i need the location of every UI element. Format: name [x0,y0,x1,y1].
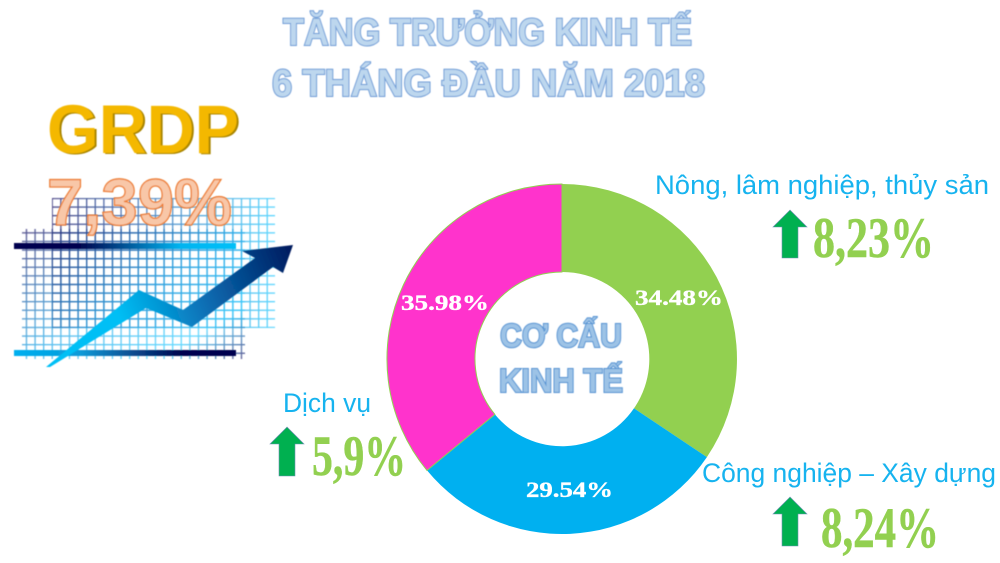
bottom bar [14,350,236,356]
icon: up arrow [773,210,807,258]
label: Công nghiệp – Xây dựng [702,458,996,488]
label: Nông, lâm nghiệp, thủy sản [655,170,989,200]
growth chart illustration [14,198,293,367]
title: 6 THÁNG ĐẦU NĂM 2018 [272,61,705,105]
GRDP heading: GRDP [47,91,239,168]
title [272,10,705,105]
grid panel: front [22,229,245,359]
donut center label: KINH TẾ [499,362,623,399]
GRDP value: 7,39% [47,165,232,239]
value: 35.98%: 35.98% [401,290,489,315]
value: 34.48%: 34.48% [635,285,723,310]
icon: up arrow [773,497,807,546]
callout: agriculture [655,170,989,270]
value: 29.54%: 29.54% [526,477,613,502]
grid panel: back [52,198,275,328]
slice: services 35.98% [387,184,562,470]
rising arrow [46,245,293,367]
title: TĂNG TRƯỞNG KINH TẾ [283,10,692,54]
icon: up arrow [270,427,304,476]
value: 8,23% [813,207,934,270]
value: 8,24% [821,497,939,560]
label: Dịch vụ [283,388,371,418]
callout: services [270,388,406,488]
donut center label: CƠ CẤU [500,317,622,354]
donut chart [387,184,737,534]
value: 5,9% [312,425,406,488]
slice: agriculture 34.48% [562,184,737,457]
slice: industry 29.54% [427,408,707,534]
GRDP heading: GRDP [49,92,241,169]
donut center label [499,317,623,399]
callout: industry [702,458,996,560]
top bar [14,243,236,249]
